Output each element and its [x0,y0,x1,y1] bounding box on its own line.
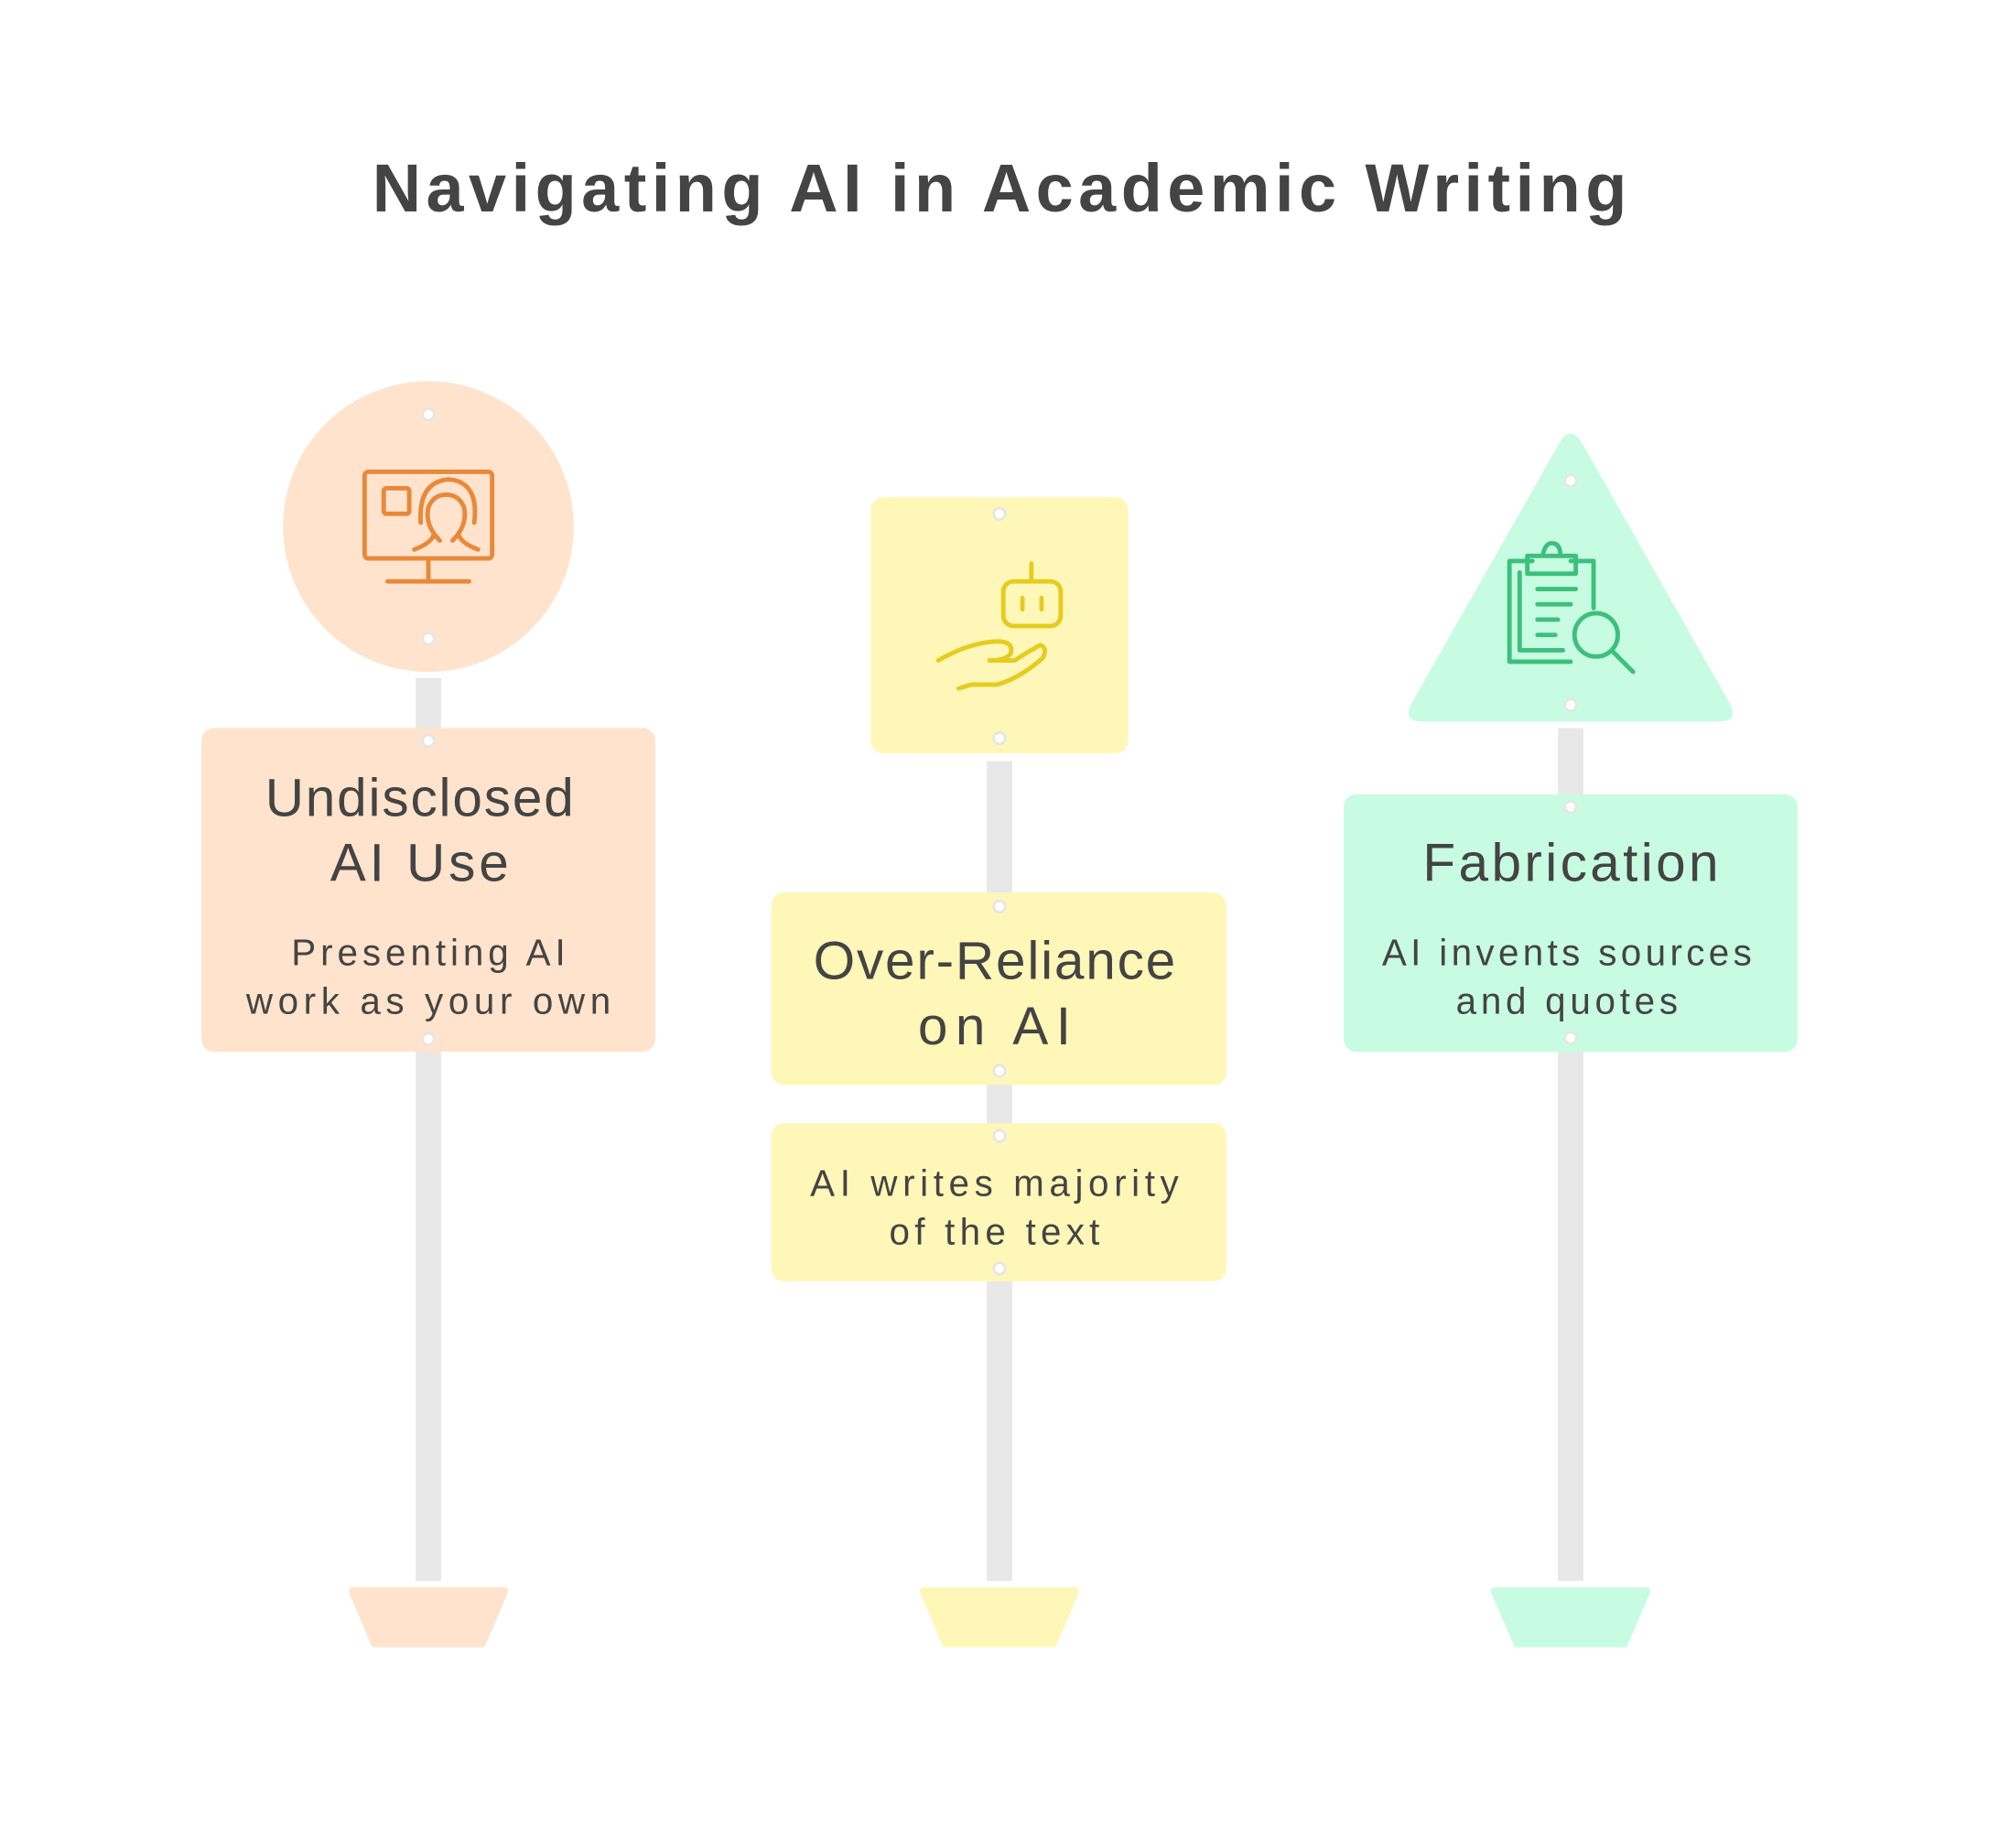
base: middle [920,1587,1079,1648]
pole: left [416,678,441,1581]
pole: middle [987,762,1012,1581]
connector dots [423,408,1576,1274]
title: Navigating AI in Academic Writing [373,150,1626,226]
icon: monitor with person [364,471,492,581]
heading: over-reliance: Over-Reliance [814,932,1175,991]
description: over-reliance: AI writes majority [810,1162,1180,1205]
icon: hand with robot [938,564,1061,688]
base: left [349,1587,508,1648]
icon: clipboard with magnifier [1509,543,1633,672]
description: fabrication: AI invents sources [1382,931,1752,973]
column: over-reliance: of the text [890,1210,1099,1252]
column: fabrication: and quotes [1456,979,1678,1021]
pole: right [1558,728,1583,1581]
column: undisclosed AI use: AI Use [330,833,509,892]
column: fabrication [1344,434,1798,1648]
column: undisclosed AI use: work as your own [245,979,611,1021]
description: undisclosed: Presenting AI [291,931,566,973]
box: over-reliance description [772,1123,1226,1281]
icon triangle: right [1409,434,1733,721]
base: right [1491,1587,1650,1648]
column: over-reliance: on AI [918,997,1071,1056]
heading: fabrication: Fabrication [1422,833,1719,892]
box: fabrication [1344,794,1798,1052]
heading: undisclosed AI use: Undisclosed [265,768,574,827]
box: undisclosed AI use [201,728,655,1052]
column: over-reliance [772,497,1226,1648]
box: over-reliance heading [772,892,1226,1085]
icon square: middle [870,497,1129,753]
column: undisclosed AI use [201,381,655,1648]
icon circle: left [283,381,574,672]
